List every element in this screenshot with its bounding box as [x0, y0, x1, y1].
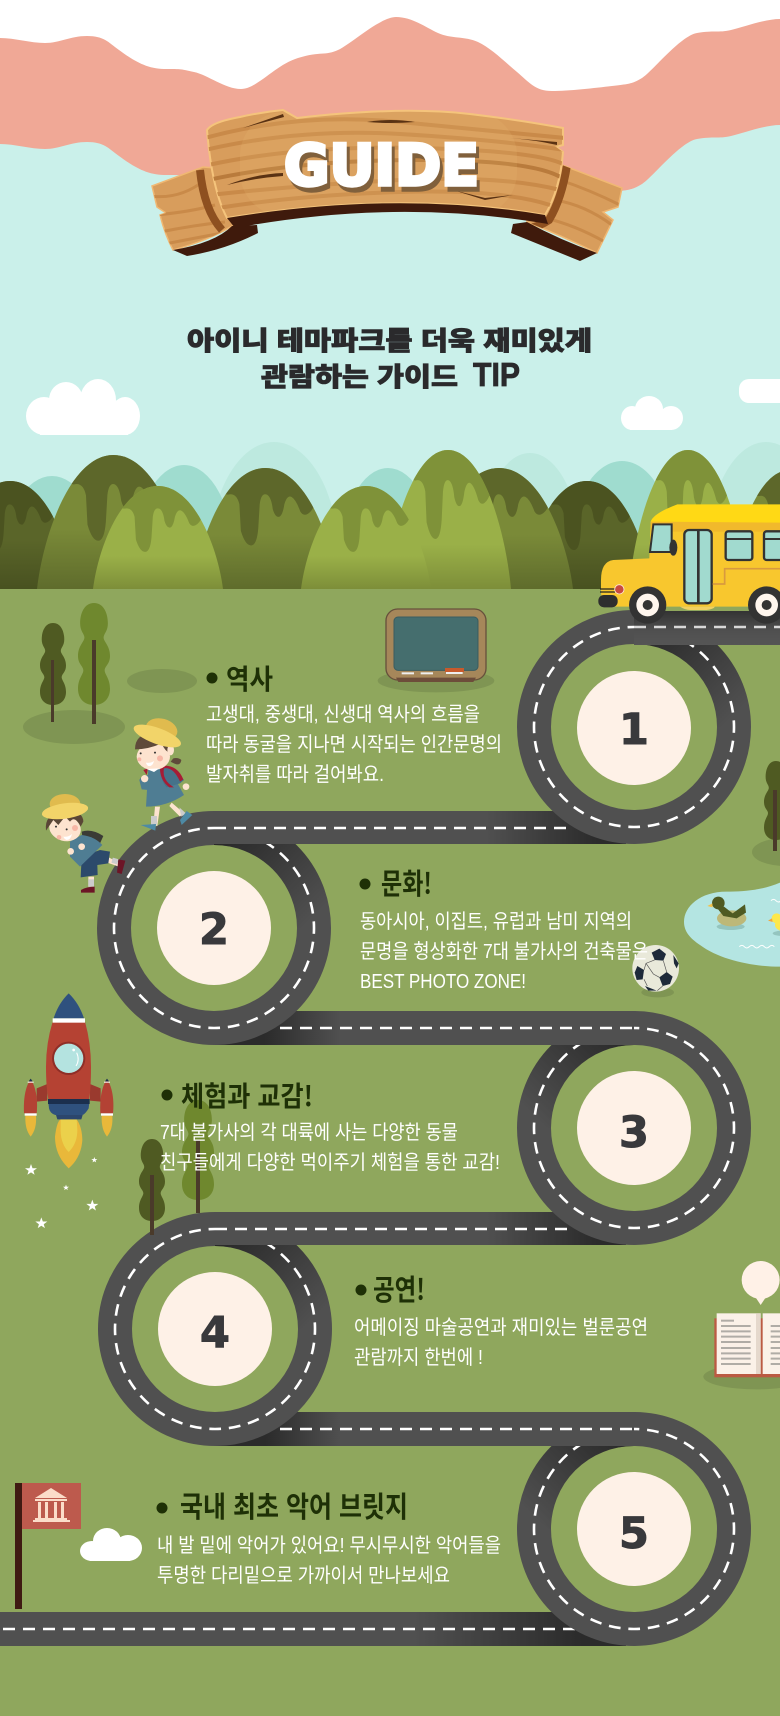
background: ground	[0, 589, 780, 1716]
step 3 text: experience: 7대 불가사의 각 대륙에 사는 다양한 동물	[160, 1121, 458, 1144]
step 1 text: history: 고생대, 중생대, 신생대 역사의 흐름을	[206, 703, 480, 726]
step 3 text: experience: 친구들에게 다양한 먹이주기 체험을 통한 교감!	[160, 1151, 500, 1174]
cloud: top right edge	[739, 379, 780, 403]
sign: GUIDE lettering: GUIDE	[287, 138, 482, 204]
trees: top left pair	[23, 603, 125, 744]
step 2 text: culture: 문명을 형상화한 7대 불가사의 건축물은	[360, 940, 648, 963]
step 3 number badge	[577, 1071, 691, 1185]
step 4 number badge: 4	[200, 1308, 230, 1358]
sign: right tail plank	[511, 165, 622, 261]
step 4 text: performance: 공연!	[373, 1267, 425, 1309]
icon: museum	[33, 1488, 70, 1522]
step 5 text: crocodile bridge: 내 발 밑에 악어가 있어요! 무시무시한 악어들을	[157, 1534, 501, 1557]
water ripples	[739, 945, 774, 948]
subtitle: TIP	[473, 356, 520, 393]
step 1 text: history	[206, 658, 502, 786]
road: bottom straight	[0, 1612, 626, 1646]
road	[0, 611, 780, 1646]
step 4 text: performance: 관람까지 한번에 !	[354, 1346, 483, 1369]
rocket	[24, 993, 113, 1168]
subtitle: 관람하는 가이드	[261, 362, 458, 392]
duck: green	[707, 897, 746, 930]
cloud: large left	[26, 379, 140, 435]
open book with speech bubble	[703, 1261, 780, 1389]
road: straight 4 to 5	[215, 1412, 634, 1446]
road: straight 1 to 2	[214, 811, 626, 844]
step 2 text: culture	[360, 861, 648, 993]
road: ring 3	[534, 1028, 734, 1228]
pond with ducks	[684, 883, 780, 967]
step 5 text: crocodile bridge	[156, 1484, 501, 1587]
step 3 text: experience	[160, 1075, 500, 1174]
step 4 number badge	[158, 1272, 272, 1386]
duck: yellow	[768, 913, 780, 936]
step 1 text: history: 역사	[226, 658, 273, 698]
cloud: lower left	[80, 1528, 142, 1561]
mountains	[0, 442, 780, 678]
cloud: small right	[621, 396, 683, 430]
road: ring 2	[114, 828, 314, 1028]
step 5 text: crocodile bridge: 투명한 다리밑으로 가까이서 만나보세요	[157, 1564, 450, 1587]
road: straight 3 to 4	[215, 1212, 626, 1245]
step 5 number badge: 5	[619, 1509, 649, 1559]
road: ring 4	[115, 1229, 315, 1429]
step 2 number badge: 2	[199, 905, 229, 955]
step 1 number badge: 1	[619, 705, 649, 755]
sign: main plank	[205, 110, 565, 228]
step 3 text: experience: 체험과 교감!	[181, 1075, 313, 1115]
road: ring 1	[534, 627, 734, 827]
sign: GUIDE lettering: GUIDE	[284, 133, 479, 199]
step 1 number badge	[577, 671, 691, 785]
subtitle	[187, 326, 592, 393]
character: girl	[131, 715, 192, 831]
decorative ground shadow	[127, 669, 197, 693]
soccer ball	[632, 945, 679, 997]
trees: middle pair	[139, 1100, 214, 1235]
blackboard	[378, 609, 494, 692]
road: straight 2 to 3	[214, 1011, 634, 1045]
sign: left tail plank	[150, 167, 258, 256]
step 3 number badge: 3	[619, 1108, 649, 1158]
tree: right edge	[752, 761, 780, 866]
road: ring 5	[534, 1429, 734, 1629]
step 1 text: history: 따라 동굴을 지나면 시작되는 인간문명의	[206, 733, 502, 756]
road: top straight under bus	[634, 611, 780, 645]
wooden GUIDE sign	[150, 110, 622, 261]
character: boy	[41, 794, 125, 893]
subtitle: 아이니 테마파크를 더욱 재미있게	[187, 326, 592, 356]
step 2 text: culture: BEST PHOTO ZONE!	[360, 971, 526, 993]
step 5 text: crocodile bridge: 국내 최초 악어 브릿지	[180, 1484, 408, 1526]
step 4 text: performance: 어메이징 마술공연과 재미있는 벌룬공연	[354, 1316, 648, 1339]
step 4 text: performance	[354, 1267, 648, 1369]
step 2 text: culture: 문화!	[381, 861, 432, 903]
step 2 number badge	[157, 871, 271, 985]
step 5 number badge	[577, 1472, 691, 1586]
stars	[25, 1157, 98, 1228]
step 1 text: history: 발자취를 따라 걸어봐요.	[206, 763, 384, 786]
flag with museum icon	[15, 1483, 81, 1609]
step 2 text: culture: 동아시아, 이집트, 유럽과 남미 지역의	[360, 910, 632, 933]
school bus	[598, 504, 780, 624]
